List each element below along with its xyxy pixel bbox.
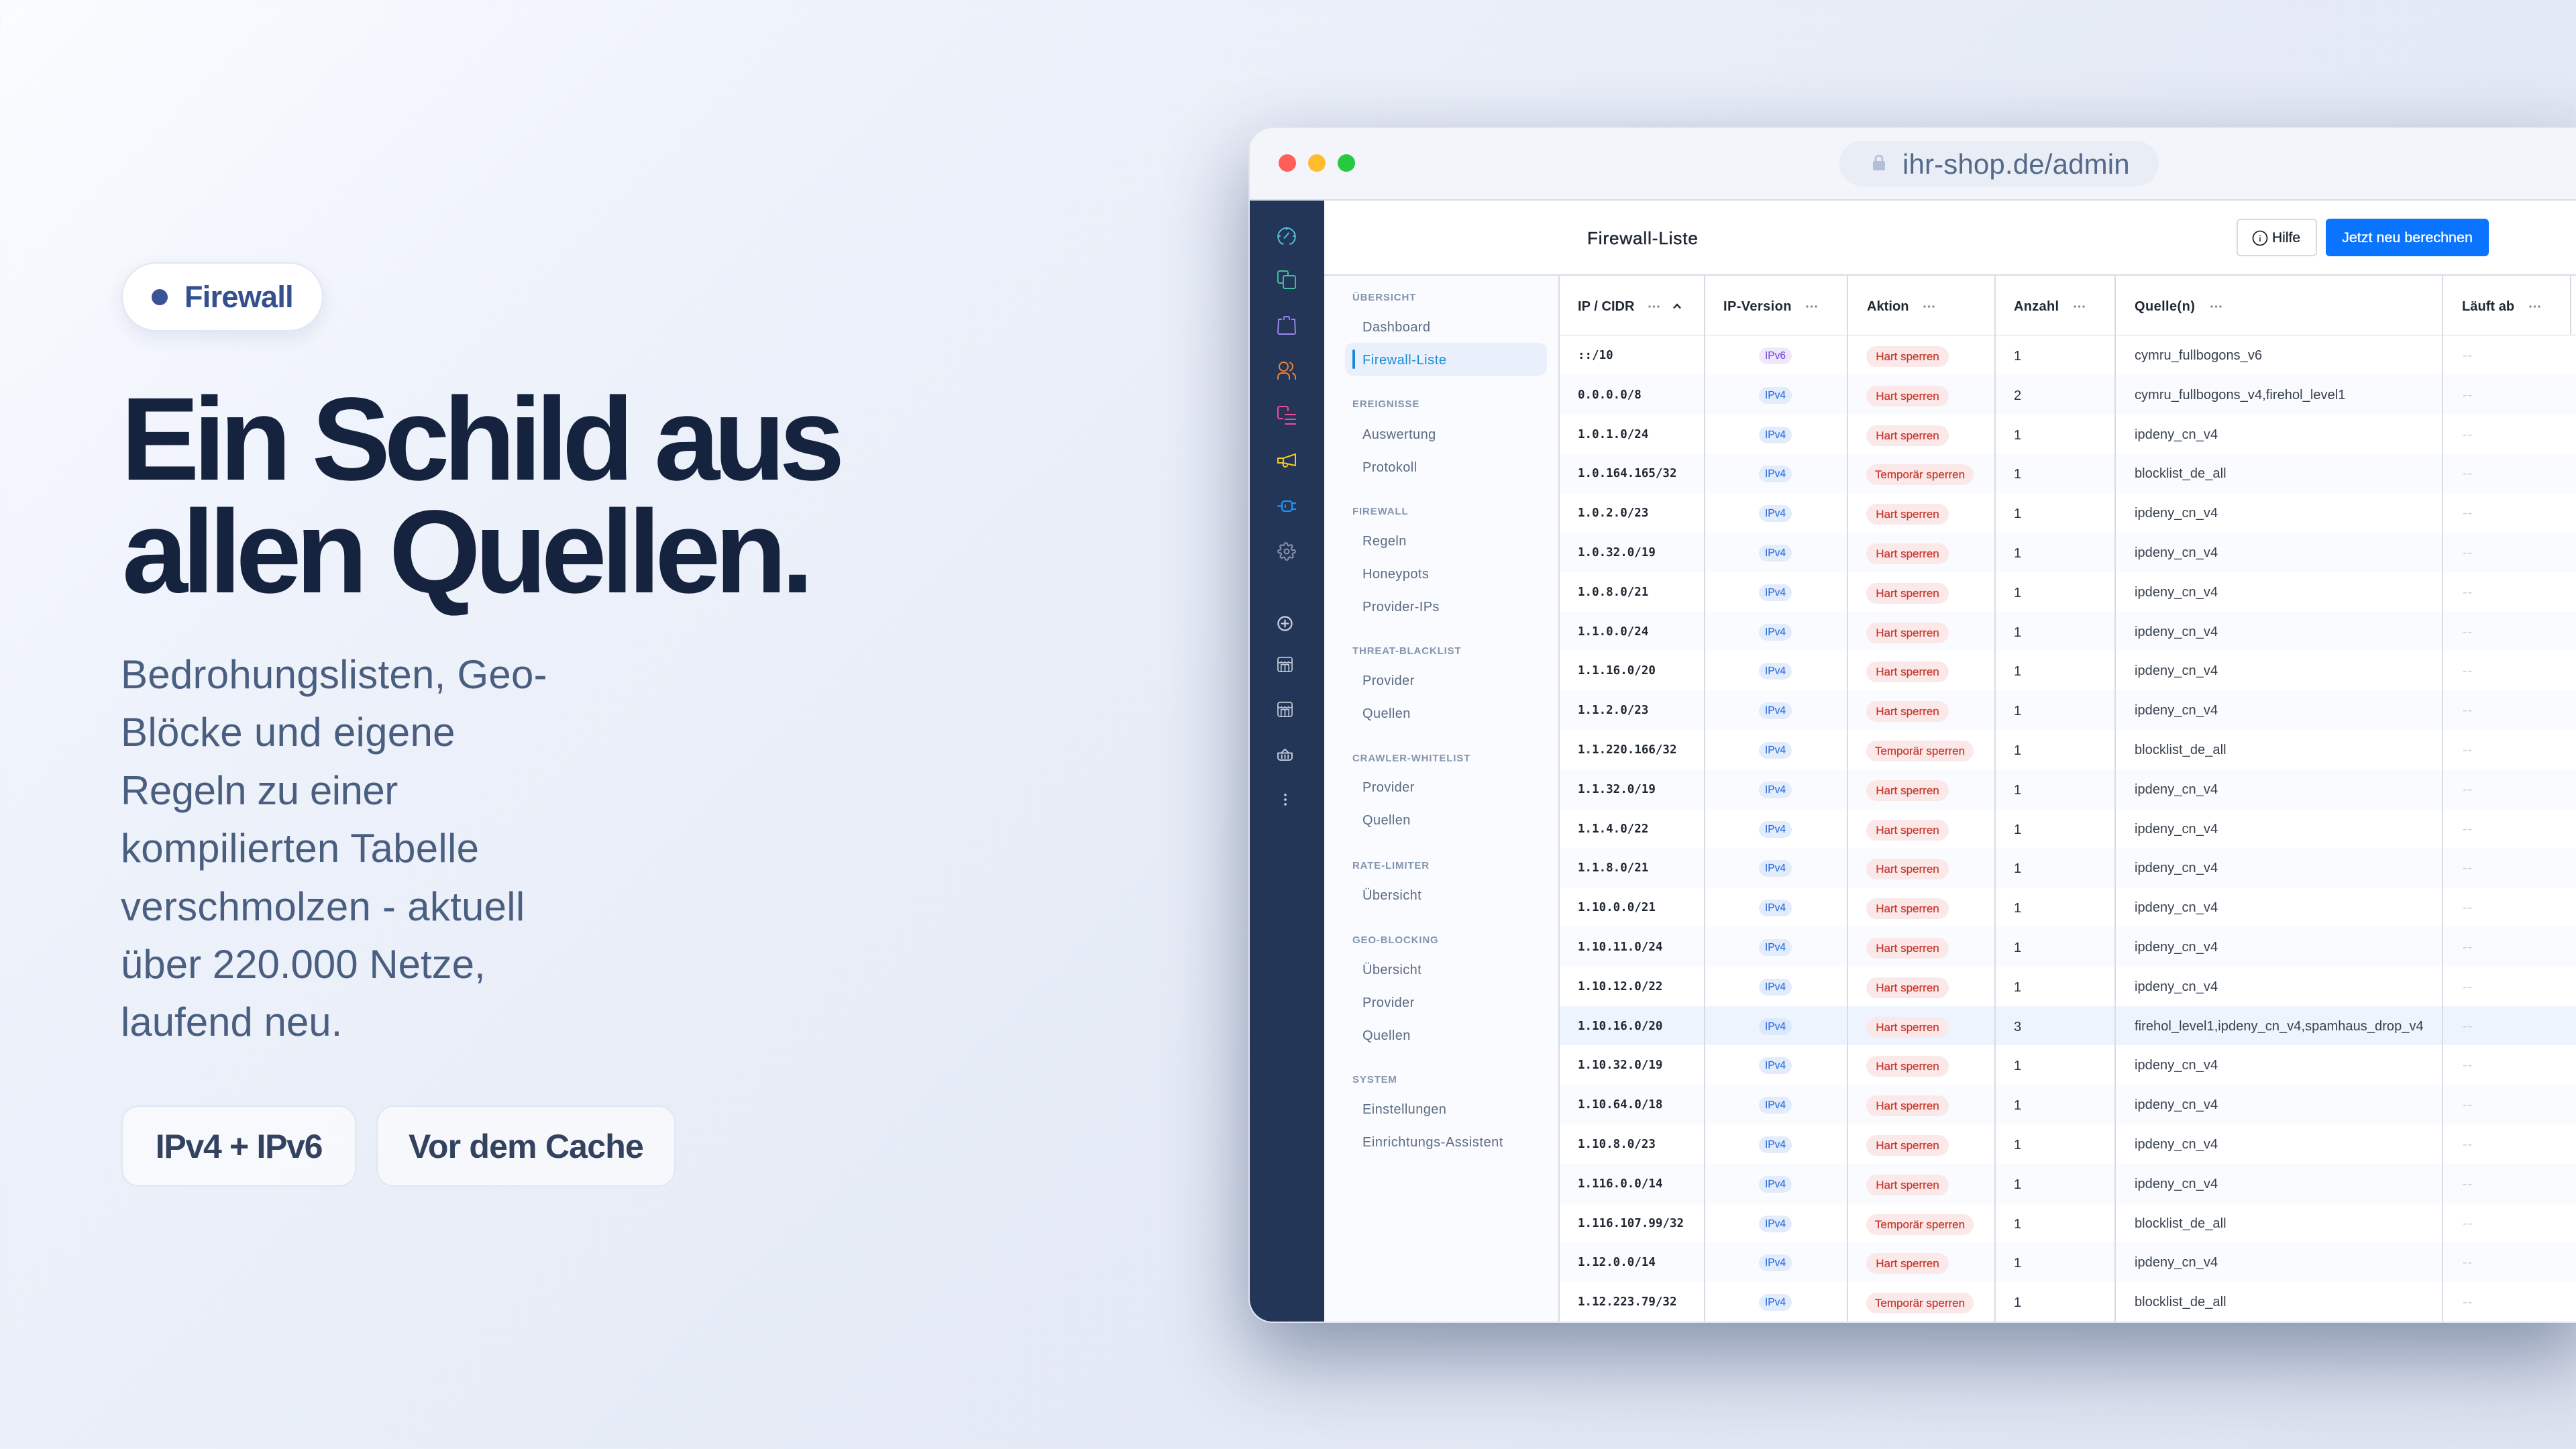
row 14: 1 xyxy=(2014,861,2021,876)
description text: laufend neu. xyxy=(121,1000,342,1044)
pill: IPv4 + IPv6 xyxy=(121,1106,356,1187)
row 21: IPv4 xyxy=(1765,1139,1786,1150)
row 6: IPv4 xyxy=(1765,547,1786,559)
row 16: ipdeny_cn_v4 xyxy=(2135,940,2218,955)
row 18: highlighted: 1.10.16.0/20 xyxy=(1578,1020,1662,1033)
row 2: cymru_fullbogons_v4,firehol_level1 xyxy=(2135,388,2345,402)
row 8: ipdeny_cn_v4 xyxy=(2135,625,2218,639)
row 3: 1.0.1.0/24 xyxy=(1578,428,1648,441)
row 4: 1.0.164.165/32 xyxy=(1578,467,1677,480)
row 13: IPv4 xyxy=(1765,824,1786,835)
page header xyxy=(1324,201,2576,276)
badge dot xyxy=(152,289,168,305)
row 5: ipdeny_cn_v4 xyxy=(2135,506,2218,521)
badge: Firewall xyxy=(121,262,323,331)
row 25: Temporär sperren xyxy=(1875,1297,1965,1309)
description text: Regeln zu einer xyxy=(121,768,398,813)
row 11: -- xyxy=(2463,743,2473,757)
pill: Vor dem Cache xyxy=(376,1106,676,1187)
nav: menu: Einstellungen xyxy=(1362,1102,1446,1117)
row 8: 1.1.0.0/24 xyxy=(1578,625,1648,639)
row 25: 1 xyxy=(2014,1295,2021,1310)
row 23 xyxy=(1559,1203,2576,1242)
row 7: Hart sperren xyxy=(1876,587,1939,600)
row 2: Hart sperren xyxy=(1876,390,1939,402)
row 1: -- xyxy=(2463,348,2473,363)
title bar xyxy=(1248,127,2576,201)
row 17: ipdeny_cn_v4 xyxy=(2135,979,2218,994)
nav: menu xyxy=(1352,292,1503,1150)
row 24: 1.12.0.0/14 xyxy=(1578,1256,1656,1269)
row 18: highlighted: Hart sperren xyxy=(1876,1021,1939,1034)
pill: IPv4 + IPv6: IPv4 + IPv6 xyxy=(156,1128,322,1165)
row 21: 1.10.8.0/23 xyxy=(1578,1138,1656,1151)
traffic lights xyxy=(1279,154,1355,172)
nav: menu: GEO-BLOCKING xyxy=(1352,934,1439,946)
nav: menu: Quellen xyxy=(1362,706,1411,721)
row 14: ipdeny_cn_v4 xyxy=(2135,861,2218,875)
row 11 xyxy=(1559,730,2576,769)
row 7: ipdeny_cn_v4 xyxy=(2135,585,2218,600)
row 12: 1.1.32.0/19 xyxy=(1578,783,1656,796)
row 16: 1 xyxy=(2014,941,2021,955)
row 20 xyxy=(1559,1085,2576,1124)
row 13: ipdeny_cn_v4 xyxy=(2135,822,2218,837)
title: allen Quellen. xyxy=(122,486,808,618)
row 19: ipdeny_cn_v4 xyxy=(2135,1058,2218,1073)
row 23: IPv4 xyxy=(1765,1218,1786,1230)
row 2: -- xyxy=(2463,388,2473,402)
row 4: IPv4 xyxy=(1765,468,1786,480)
row 11: IPv4 xyxy=(1765,745,1786,756)
row 4: -- xyxy=(2463,466,2473,481)
icon: plug xyxy=(1277,500,1296,512)
row 7: 1 xyxy=(2014,586,2021,600)
nav: menu: Übersicht xyxy=(1362,963,1421,977)
row 10: 1 xyxy=(2014,704,2021,718)
row 22: 1 xyxy=(2014,1177,2021,1192)
row 7: -- xyxy=(2463,585,2473,600)
row 8: Hart sperren xyxy=(1876,627,1939,639)
page title: Firewall-Liste xyxy=(1587,228,1699,248)
row 7: 1.0.8.0/21 xyxy=(1578,586,1648,599)
dark icon rail xyxy=(1248,201,1324,1322)
row 15: -- xyxy=(2463,900,2473,915)
row 21 xyxy=(1559,1124,2576,1164)
row 16: Hart sperren xyxy=(1876,942,1939,955)
row 5: 1.0.2.0/23 xyxy=(1578,506,1648,520)
row 21: -- xyxy=(2463,1137,2473,1152)
row 9: IPv4 xyxy=(1765,665,1786,677)
row 20: -- xyxy=(2463,1097,2473,1112)
row 15: 1.10.0.0/21 xyxy=(1578,901,1656,914)
row 21: 1 xyxy=(2014,1138,2021,1152)
row 16 xyxy=(1559,927,2576,967)
row 19: 1 xyxy=(2014,1059,2021,1073)
row 23: -- xyxy=(2463,1216,2473,1231)
row 23: blocklist_de_all xyxy=(2135,1216,2226,1231)
browser window xyxy=(1248,127,2576,1323)
row 4: 1 xyxy=(2014,467,2021,482)
title: Ein Schild aus xyxy=(121,374,839,505)
row 9: Hart sperren xyxy=(1876,665,1939,678)
address bar xyxy=(1839,141,2159,186)
nav: menu: Quellen xyxy=(1362,1028,1411,1043)
row 10 xyxy=(1559,690,2576,730)
row 23: Temporär sperren xyxy=(1875,1218,1965,1231)
description text xyxy=(121,652,547,1044)
row 24: 1 xyxy=(2014,1256,2021,1271)
row 3: 1 xyxy=(2014,428,2021,443)
row 6 xyxy=(1559,533,2576,572)
row 24: Hart sperren xyxy=(1876,1257,1939,1270)
table header: IP-Version xyxy=(1723,299,1792,314)
row 23: 1.116.107.99/32 xyxy=(1578,1217,1684,1230)
row 25: 1.12.223.79/32 xyxy=(1578,1295,1677,1309)
nav: menu: EREIGNISSE xyxy=(1352,398,1419,410)
icon: copy xyxy=(1277,270,1296,289)
row 22: 1.116.0.0/14 xyxy=(1578,1177,1662,1191)
row 25: blocklist_de_all xyxy=(2135,1295,2226,1309)
icon: add xyxy=(1277,616,1293,631)
row 6: 1.0.32.0/19 xyxy=(1578,546,1656,559)
button: Jetzt neu berechnen xyxy=(2326,219,2489,256)
row 13: Hart sperren xyxy=(1876,824,1939,837)
row 18: highlighted: -- xyxy=(2463,1019,2473,1034)
table header: IP / CIDR xyxy=(1578,299,1635,314)
button: Hilfe xyxy=(2237,219,2317,256)
row 18: highlighted: IPv4 xyxy=(1765,1021,1786,1032)
nav: menu: CRAWLER-WHITELIST xyxy=(1352,753,1470,764)
row 4: Temporär sperren xyxy=(1875,468,1965,481)
row 24: ipdeny_cn_v4 xyxy=(2135,1255,2218,1270)
nav: menu: Provider xyxy=(1362,674,1415,688)
row 5: IPv4 xyxy=(1765,508,1786,519)
row 20: IPv4 xyxy=(1765,1099,1786,1111)
row 4 xyxy=(1559,453,2576,493)
row 2: 2 xyxy=(2014,388,2021,403)
row 12: ipdeny_cn_v4 xyxy=(2135,782,2218,797)
row 2: IPv4 xyxy=(1765,390,1786,401)
icon: users xyxy=(1277,362,1296,380)
row 20: ipdeny_cn_v4 xyxy=(2135,1097,2218,1112)
title xyxy=(121,374,840,618)
description text: über 220.000 Netze, xyxy=(121,942,486,987)
row 17: IPv4 xyxy=(1765,981,1786,993)
description text: Bedrohungslisten, Geo- xyxy=(121,652,547,697)
row 5: Hart sperren xyxy=(1876,508,1939,521)
row 10: IPv4 xyxy=(1765,705,1786,716)
row 10: 1.1.2.0/23 xyxy=(1578,704,1648,717)
description text: verschmolzen - aktuell xyxy=(121,884,525,929)
row 3: -- xyxy=(2463,427,2473,442)
row 2: 0.0.0.0/8 xyxy=(1578,388,1642,402)
row 12: IPv4 xyxy=(1765,784,1786,796)
row 25 xyxy=(1559,1282,2576,1322)
row 6: ipdeny_cn_v4 xyxy=(2135,545,2218,560)
nav: menu: Regeln xyxy=(1362,534,1407,549)
table rows xyxy=(1560,335,2576,1313)
row 10: ipdeny_cn_v4 xyxy=(2135,703,2218,718)
row 21: ipdeny_cn_v4 xyxy=(2135,1137,2218,1152)
row 6: Hart sperren xyxy=(1876,547,1939,560)
nav: menu: Provider xyxy=(1362,996,1415,1010)
row 19: Hart sperren xyxy=(1876,1060,1939,1073)
row 11: Temporär sperren xyxy=(1875,745,1965,757)
icon: gauge xyxy=(1277,227,1296,244)
nav: menu: FIREWALL xyxy=(1352,506,1408,517)
nav: menu: Dashboard xyxy=(1362,320,1430,335)
row 16: -- xyxy=(2463,940,2473,955)
row 3 xyxy=(1559,415,2576,453)
description text: Blöcke und eigene xyxy=(121,710,455,755)
row 8: IPv4 xyxy=(1765,627,1786,638)
icon: info xyxy=(2253,231,2267,246)
row 13: 1.1.4.0/22 xyxy=(1578,822,1648,836)
row 23: 1 xyxy=(2014,1217,2021,1232)
icon: more xyxy=(1284,794,1287,806)
row 22: ipdeny_cn_v4 xyxy=(2135,1177,2218,1191)
row 12: 1 xyxy=(2014,783,2021,798)
nav: menu: Übersicht xyxy=(1362,888,1421,903)
table header: Quelle(n) xyxy=(2135,299,2195,314)
table header xyxy=(1558,276,2576,336)
nav: menu: Protokoll xyxy=(1362,460,1417,475)
row 17 xyxy=(1559,967,2576,1006)
row 16: IPv4 xyxy=(1765,942,1786,953)
icon: store 2 xyxy=(1277,702,1293,717)
nav: menu: Firewall-Liste xyxy=(1362,353,1447,368)
table header: Aktion xyxy=(1867,299,1909,314)
row 4: blocklist_de_all xyxy=(2135,466,2226,481)
row 13: 1 xyxy=(2014,822,2021,837)
row 18: highlighted: firehol_level1,ipdeny_cn_v4,spamhaus_drop_v4 xyxy=(2135,1019,2424,1034)
row 14: -- xyxy=(2463,861,2473,875)
row 19 xyxy=(1559,1045,2576,1085)
row 17: Hart sperren xyxy=(1876,981,1939,994)
row 14: Hart sperren xyxy=(1876,863,1939,875)
row 10: -- xyxy=(2463,703,2473,718)
row 11: 1 xyxy=(2014,743,2021,758)
nav: menu: Honeypots xyxy=(1362,567,1429,582)
row 14: 1.1.8.0/21 xyxy=(1578,861,1648,875)
nav: menu: Einrichtungs-Assistent xyxy=(1362,1135,1503,1150)
row 17: 1.10.12.0/22 xyxy=(1578,980,1662,994)
row 24: -- xyxy=(2463,1255,2473,1270)
row 24 xyxy=(1559,1242,2576,1282)
nav: menu: ÜBERSICHT xyxy=(1352,292,1416,303)
row 12: Hart sperren xyxy=(1876,784,1939,797)
nav: menu: SYSTEM xyxy=(1352,1074,1397,1085)
nav: menu: Provider xyxy=(1362,780,1415,795)
icon: megaphone xyxy=(1277,453,1296,468)
row 9: 1 xyxy=(2014,664,2021,679)
row 5 xyxy=(1559,493,2576,533)
row 17: -- xyxy=(2463,979,2473,994)
row 19: 1.10.32.0/19 xyxy=(1578,1059,1662,1072)
row 11: 1.1.220.166/32 xyxy=(1578,743,1677,757)
row 22: IPv4 xyxy=(1765,1179,1786,1190)
row 8: 1 xyxy=(2014,625,2021,640)
row 1: cymru_fullbogons_v6 xyxy=(2135,348,2262,363)
description text: kompilierten Tabelle xyxy=(121,826,479,871)
row 25: -- xyxy=(2463,1295,2473,1309)
row 15: 1 xyxy=(2014,901,2021,916)
row 19: IPv4 xyxy=(1765,1060,1786,1071)
icon: bag xyxy=(1277,316,1296,335)
row 2 xyxy=(1559,375,2576,415)
icon: basket xyxy=(1277,749,1293,761)
row 7: IPv4 xyxy=(1765,587,1786,598)
row 14: IPv4 xyxy=(1765,863,1786,874)
row 18: highlighted: 3 xyxy=(2014,1020,2021,1034)
row 5: 1 xyxy=(2014,506,2021,521)
navigation panel xyxy=(1324,276,1558,1322)
row 20: Hart sperren xyxy=(1876,1099,1939,1112)
row 9: ipdeny_cn_v4 xyxy=(2135,663,2218,678)
row 15: IPv4 xyxy=(1765,902,1786,914)
row 8: -- xyxy=(2463,625,2473,639)
row 9 xyxy=(1559,651,2576,690)
row 9: 1.1.16.0/20 xyxy=(1578,664,1656,678)
nav: active item xyxy=(1345,343,1547,376)
row 22 xyxy=(1559,1164,2576,1203)
icon: list xyxy=(1277,406,1296,425)
row 20: 1 xyxy=(2014,1098,2021,1113)
row 15: ipdeny_cn_v4 xyxy=(2135,900,2218,915)
row 13: -- xyxy=(2463,822,2473,837)
nav: menu: Auswertung xyxy=(1362,427,1436,442)
row 17: 1 xyxy=(2014,980,2021,995)
nav: menu: Quellen xyxy=(1362,813,1411,828)
nav: menu: Provider-IPs xyxy=(1362,600,1440,614)
row 1: ::/10 xyxy=(1578,349,1613,362)
row 14 xyxy=(1559,848,2576,888)
row 1: IPv6 xyxy=(1765,350,1786,362)
icon: settings xyxy=(1277,542,1296,561)
pill: Vor dem Cache: Vor dem Cache xyxy=(409,1128,643,1165)
table header: Anzahl xyxy=(2014,299,2059,314)
help label: Hilfe xyxy=(2272,230,2300,246)
row 12: -- xyxy=(2463,782,2473,797)
row 24: IPv4 xyxy=(1765,1257,1786,1269)
row 3: ipdeny_cn_v4 xyxy=(2135,427,2218,442)
row 21: Hart sperren xyxy=(1876,1139,1939,1152)
row 3: IPv4 xyxy=(1765,429,1786,441)
row 22: Hart sperren xyxy=(1876,1179,1939,1191)
row 1: Hart sperren xyxy=(1876,350,1939,363)
row 12 xyxy=(1559,769,2576,809)
table header: Läuft ab xyxy=(2462,299,2514,314)
row 3: Hart sperren xyxy=(1876,429,1939,442)
row 1 xyxy=(1559,335,2576,375)
row 5: -- xyxy=(2463,506,2473,521)
nav: menu: RATE-LIMITER xyxy=(1352,860,1430,871)
badge label: Firewall xyxy=(184,280,293,314)
row 22: -- xyxy=(2463,1177,2473,1191)
row 16: 1.10.11.0/24 xyxy=(1578,941,1662,954)
row 25: IPv4 xyxy=(1765,1297,1786,1308)
row 6: -- xyxy=(2463,545,2473,560)
row 9: -- xyxy=(2463,663,2473,678)
row 20: 1.10.64.0/18 xyxy=(1578,1098,1662,1112)
row 10: Hart sperren xyxy=(1876,705,1939,718)
row 15: Hart sperren xyxy=(1876,902,1939,915)
icon: lock xyxy=(1873,155,1885,170)
row 15 xyxy=(1559,888,2576,927)
row 11: blocklist_de_all xyxy=(2135,743,2226,757)
icon: store xyxy=(1277,657,1293,672)
row 6: 1 xyxy=(2014,546,2021,561)
url text: ihr-shop.de/admin xyxy=(1902,148,2130,180)
row 19: -- xyxy=(2463,1058,2473,1073)
row 18: highlighted xyxy=(1559,1006,2576,1045)
button: Jetzt neu berechnen: Jetzt neu berechnen xyxy=(2342,229,2473,246)
row 13 xyxy=(1559,809,2576,848)
row 8 xyxy=(1559,612,2576,651)
row 1: 1 xyxy=(2014,349,2021,364)
nav: menu: THREAT-BLACKLIST xyxy=(1352,645,1461,657)
row 7 xyxy=(1559,572,2576,612)
